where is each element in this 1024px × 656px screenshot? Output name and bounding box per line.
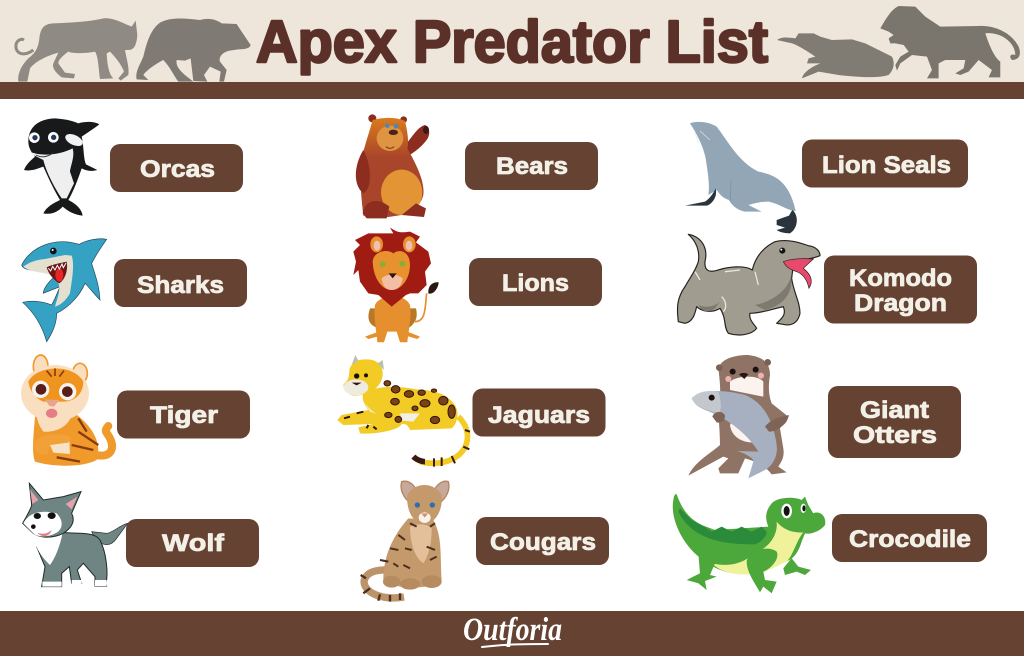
icon: bear [356,114,429,218]
icon: tiger [21,355,112,466]
label: Bears: Bears [496,153,568,180]
icon: crocodile silhouette [777,33,894,78]
label: Lion Seals [802,140,968,188]
icon: lion [353,228,439,342]
label: Orcas [110,144,243,192]
icon: cougar silhouette [16,18,137,82]
icon: bear silhouette [136,18,251,82]
label: Komodo Dragon: Komodo [849,265,952,292]
label: Giant Otters: Giant [860,397,929,424]
icon: lion seal [685,122,797,233]
icon: cougar [361,481,449,602]
icon: giant otter [688,355,789,478]
label: Sharks [114,259,247,307]
footer band [0,611,1024,656]
icon: lion silhouette [880,6,1020,78]
label: Bears [465,142,598,190]
icon: komodo dragon [677,234,820,335]
label: Komodo Dragon [824,256,977,324]
label: Tiger: Tiger [150,402,218,429]
label: Orcas: Orcas [140,156,215,183]
label: Tiger [117,390,250,438]
label: Lions [469,258,602,306]
label: Cougars [476,517,609,565]
label: Jaguars [472,388,606,436]
label: Wolf: Wolf [162,530,225,557]
label: Lions: Lions [502,270,569,297]
label: Crocodile [832,514,987,562]
icon: orca [24,118,99,216]
label: Komodo Dragon: Dragon [854,290,947,317]
icon: wolf [23,483,128,587]
logo: Outforia: Outforia [463,612,562,648]
label: Giant Otters [828,386,961,458]
icon: jaguar [337,355,470,467]
label: Jaguars: Jaguars [488,402,590,429]
icon: crocodile [673,494,825,593]
label: Cougars: Cougars [490,529,596,556]
label: Crocodile: Crocodile [849,526,971,553]
label: Wolf [126,519,259,567]
icon: shark [22,239,107,342]
label: Lion Seals: Lion Seals [822,152,951,179]
header band [0,0,1024,99]
label: Giant Otters: Otters [853,422,937,449]
title: Apex Predator List [256,9,768,75]
label: Sharks: Sharks [137,272,224,299]
